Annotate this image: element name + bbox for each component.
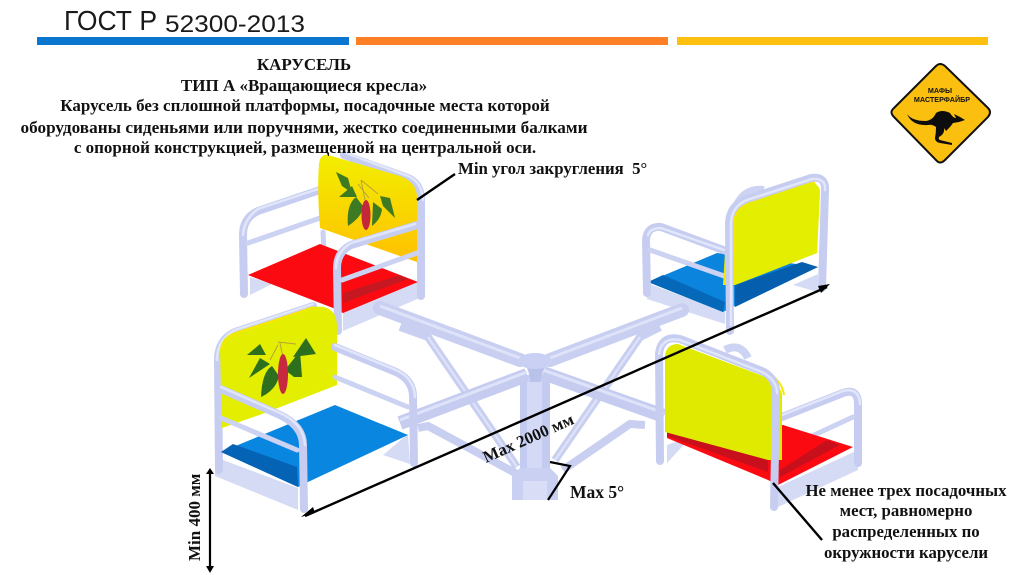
- leader: rounding angle: [417, 174, 455, 200]
- chair: top right blue seat: [646, 178, 825, 331]
- label: seats note: мест, равномерно: [840, 501, 972, 520]
- dimension label: max 2000 mm: Max 2000 мм: [480, 410, 577, 467]
- text block: carousel description: оборудованы сиденьями или поручнями, жестко соединенными балками: [20, 118, 588, 137]
- text block: carousel description: ТИП А «Вращающиеся кресла»: [181, 76, 427, 95]
- leader: seats: [773, 483, 822, 540]
- logo: kangaroo road sign: МАФЫ: [928, 86, 952, 95]
- text block: carousel description: с опорной конструкцией, размещенной на центральной оси.: [74, 138, 536, 157]
- dimension label: min 400 mm: Min 400 мм: [185, 473, 204, 561]
- text block: carousel description: КАРУСЕЛЬ: [257, 55, 351, 74]
- label: seats note: [806, 481, 1007, 562]
- central column and beams: [380, 306, 682, 500]
- logo: kangaroo road sign: МАСТЕРФАЙБР: [914, 95, 970, 104]
- logo: kangaroo road sign: [892, 64, 990, 162]
- label: rounding angle: Min угол закругления 5°: [458, 159, 647, 178]
- title: 52300-2013: [165, 11, 305, 38]
- label: seats note: Не менее трех посадочных: [806, 481, 1007, 500]
- text block: carousel description: Карусель без сплошной платформы, посадочные места которой: [60, 96, 550, 115]
- header bars: [37, 37, 988, 45]
- chair: top left red seat with currant panel: [243, 153, 423, 331]
- label: seats note: окружности карусели: [824, 543, 988, 562]
- currant sprig: [247, 338, 316, 397]
- title: ГОСТ Р: [64, 5, 157, 36]
- dimension arrow: min 400 mm: [206, 468, 214, 573]
- text block: carousel description: [20, 55, 588, 157]
- chair: bottom left blue seat with currant panel: [215, 304, 415, 510]
- dimension arrow: max 2000 mm: [301, 284, 830, 517]
- currant sprig: [336, 172, 395, 230]
- label: max 5 degrees: Max 5°: [570, 482, 624, 502]
- chair: bottom right red seat: [659, 338, 860, 507]
- label: seats note: распределенных по: [832, 522, 980, 541]
- angle marker: max 5 degrees: [548, 462, 570, 500]
